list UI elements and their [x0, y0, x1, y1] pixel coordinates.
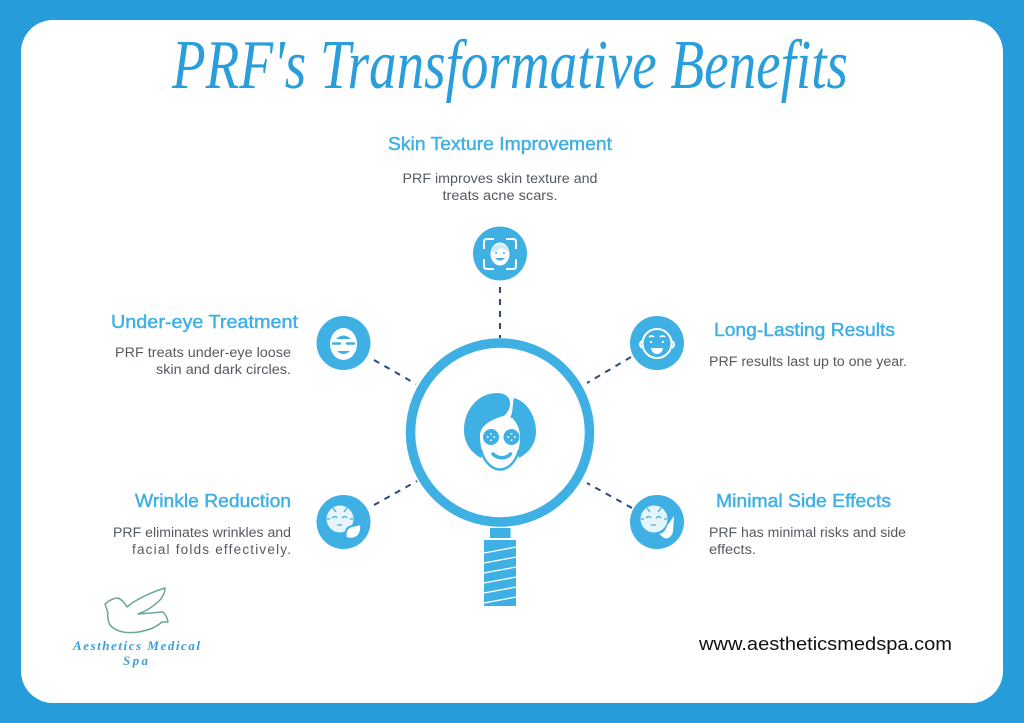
icon: under-eye mask face: [316, 316, 370, 370]
icon: minimal side effects face with hand: [630, 495, 684, 549]
icon: skin texture face scan: [473, 226, 527, 280]
text block: under-eye treatment: skin and dark circles.: [156, 362, 291, 377]
text block: minimal side effects: PRF has minimal risks and side: [709, 525, 906, 540]
text block: long-lasting results: PRF results last up to one year.: [709, 354, 907, 369]
text block: skin texture improvement: Skin Texture Improvement: [388, 134, 612, 154]
text block: skin texture improvement: treats acne scars.: [442, 188, 558, 203]
text block: long-lasting results: [709, 320, 907, 369]
magnifier handle: [484, 528, 516, 606]
text block: skin texture improvement: PRF improves skin texture and: [402, 171, 598, 186]
text block: under-eye treatment: [111, 312, 298, 377]
logo: aesthetics medical spa: [72, 588, 200, 668]
website url: www.aestheticsmedspa.com: [698, 634, 952, 654]
text block: under-eye treatment: Under-eye Treatment: [111, 312, 298, 332]
magnifying glass with central face: [410, 343, 590, 606]
text block: wrinkle reduction: [113, 491, 291, 557]
text block: minimal side effects: effects.: [709, 542, 756, 557]
text block: wrinkle reduction: Wrinkle Reduction: [135, 491, 291, 511]
text block: minimal side effects: Minimal Side Effects: [716, 491, 891, 511]
icon: wrinkle reduction face with leaf: [316, 495, 370, 549]
title: PRF's Transformative Benefits: [171, 27, 848, 104]
connector lines: [374, 287, 632, 508]
logo: aesthetics medical spa: Spa: [123, 653, 148, 668]
central face icon: [464, 393, 536, 470]
text block: minimal side effects: [709, 491, 906, 557]
magnifier ring: [410, 343, 590, 522]
text block: long-lasting results: Long-Lasting Results: [714, 320, 895, 340]
text block: under-eye treatment: PRF treats under-eye loose: [115, 345, 291, 360]
text block: wrinkle reduction: PRF eliminates wrinkles and: [113, 525, 291, 540]
text block: skin texture improvement: [388, 134, 612, 203]
logo: aesthetics medical spa: Aesthetics Medical: [72, 638, 200, 653]
icon: long-lasting results smiling face: [630, 316, 684, 370]
icon: dove: [105, 588, 168, 633]
text block: wrinkle reduction: facial folds effectively.: [132, 542, 291, 557]
